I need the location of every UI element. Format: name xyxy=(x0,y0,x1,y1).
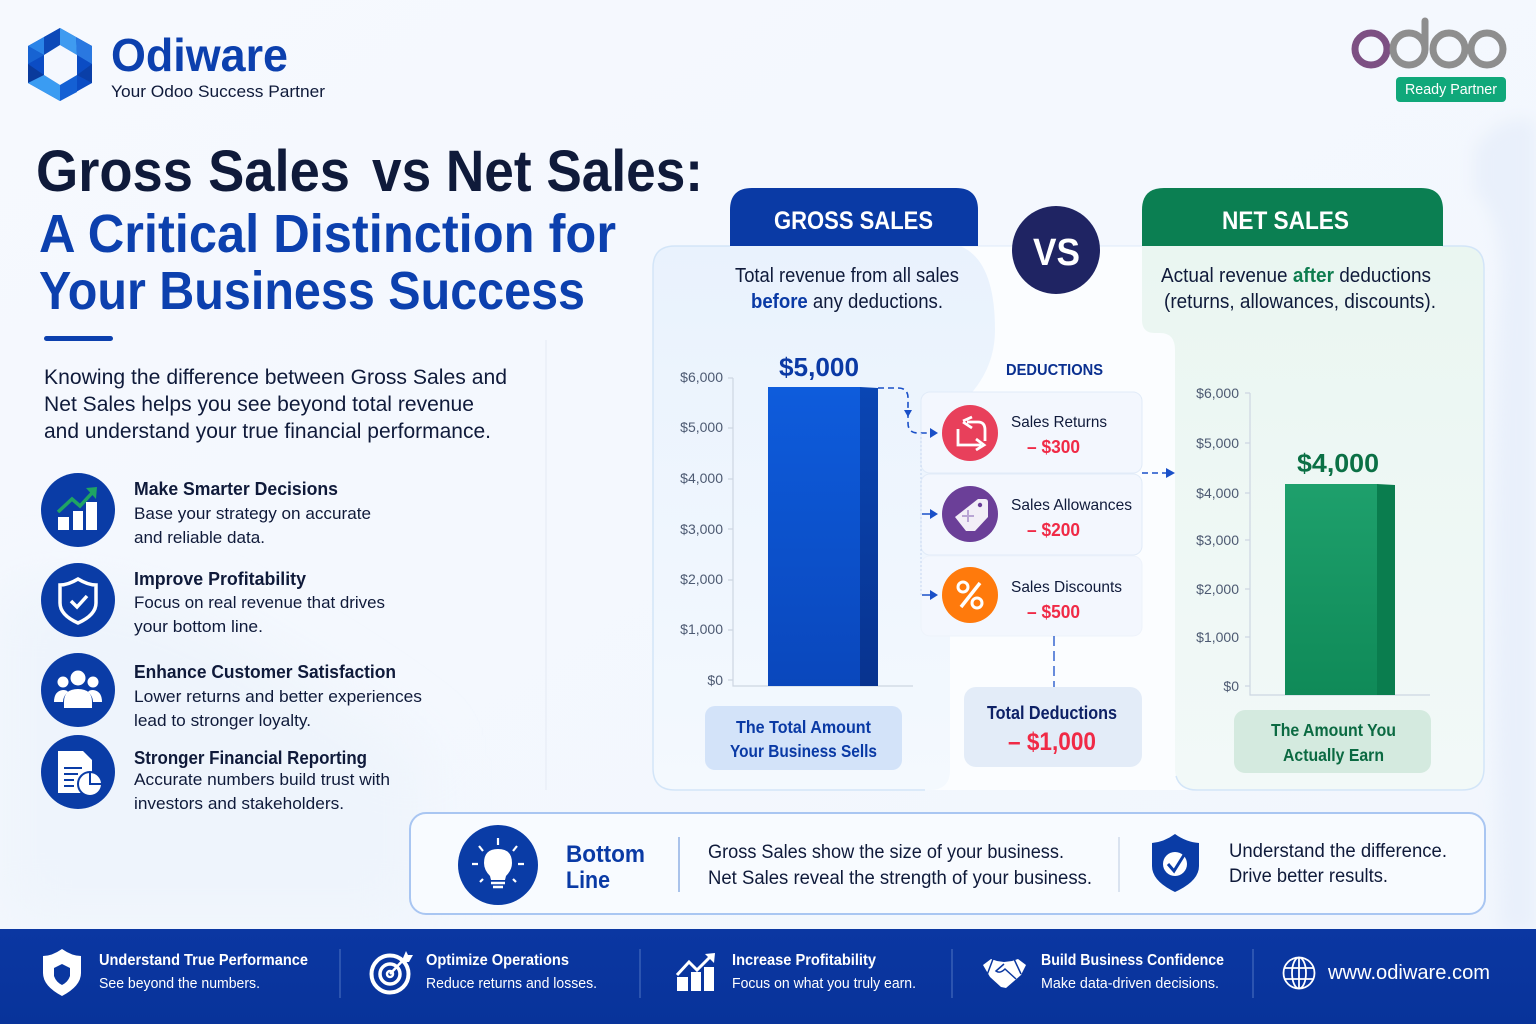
total deductions xyxy=(964,687,1142,767)
card: sales returns xyxy=(921,392,1142,473)
title: A Critical Distinction for xyxy=(39,204,616,264)
bottom line heading: Line xyxy=(566,867,610,894)
bottom line statement: Net Sales reveal the strength of your business. xyxy=(708,868,1092,889)
footer item: website xyxy=(1284,958,1490,988)
total deductions: Total Deductions xyxy=(987,703,1117,723)
VS badge xyxy=(1012,206,1100,294)
card: sales discounts: Sales Discounts xyxy=(1011,579,1122,596)
caption: the amount you actually earn: The Amount You xyxy=(1271,720,1396,740)
bar chart: gross sales: $1,000 xyxy=(680,621,723,637)
arrow: gross sales to deductions xyxy=(878,388,938,600)
net sales description xyxy=(1161,265,1436,313)
tab: gross sales: GROSS SALES xyxy=(774,207,933,235)
comparison central backdrop xyxy=(900,246,1200,790)
footer item: optimize operations xyxy=(372,951,597,992)
footer item: increase profitability xyxy=(677,952,916,992)
footer band xyxy=(0,929,1536,1024)
arrow: deductions to total xyxy=(1053,636,1055,687)
title: Your Business Success xyxy=(39,261,585,321)
call to action: Understand the difference. xyxy=(1229,841,1447,862)
title: Gross Sales xyxy=(36,139,350,204)
footer item: website: www.odiware.com xyxy=(1327,962,1490,984)
benefit: Improve Profitability: Improve Profitability xyxy=(134,568,307,589)
bar chart: net sales: $5,000 xyxy=(1196,435,1239,451)
benefit: Stronger Financial Reporting: Accurate numbers build trust with xyxy=(134,770,390,789)
card: sales returns: Sales Returns xyxy=(1011,414,1107,431)
bar chart: net sales: $3,000 xyxy=(1196,532,1239,548)
bar chart: gross sales: $5,000 xyxy=(680,419,723,435)
arrow: deductions to net sales xyxy=(1142,468,1175,478)
card: sales discounts: – $500 xyxy=(1027,602,1080,622)
card: sales allowances: Sales Allowances xyxy=(1011,497,1132,514)
panel: bottom line xyxy=(410,813,1485,914)
benefit: Make Smarter Decisions xyxy=(41,473,371,547)
tab: net sales: NET SALES xyxy=(1222,207,1349,235)
caption: the amount you actually earn xyxy=(1234,710,1431,773)
footer item: understand true performance xyxy=(43,949,308,996)
bar chart: net sales: $0 xyxy=(1223,678,1239,694)
bar chart: net sales xyxy=(1196,385,1430,695)
intro paragraph: Net Sales helps you see beyond total revenue xyxy=(44,393,474,416)
caption: the total amount your business sells xyxy=(705,706,902,770)
badge: Ready Partner: Ready Partner xyxy=(1405,82,1497,98)
bottom line heading xyxy=(566,841,645,894)
tagline: Your Odoo Success Partner xyxy=(111,82,325,101)
caption: the amount you actually earn: Actually Earn xyxy=(1283,745,1384,765)
benefit: Improve Profitability: your bottom line. xyxy=(134,617,263,636)
panel: gross sales xyxy=(653,188,995,790)
logo: Odoo Ready Partner xyxy=(1355,21,1506,102)
bar chart: gross sales: $4,000 xyxy=(680,470,723,486)
gross sales description: before any deductions. xyxy=(751,291,943,313)
footer item: build business confidence xyxy=(983,952,1224,992)
bar chart: gross sales: $0 xyxy=(707,672,723,688)
logo: Odiware xyxy=(28,28,325,101)
bottom line heading: Bottom xyxy=(566,841,645,868)
icon: percent xyxy=(942,567,998,623)
net sales description: Actual revenue after deductions xyxy=(1161,265,1431,287)
benefit: Enhance Customer Satisfaction: lead to stronger loyalty. xyxy=(134,711,311,730)
benefit: Enhance Customer Satisfaction: Enhance Customer Satisfaction xyxy=(134,661,396,682)
caption: the total amount your business sells: The Total Amount xyxy=(736,717,871,737)
icon: shield check xyxy=(1152,834,1199,892)
benefit: Make Smarter Decisions: Make Smarter Decisions xyxy=(134,478,338,499)
benefit: Stronger Financial Reporting: investors and stakeholders. xyxy=(134,794,344,813)
benefit: Enhance Customer Satisfaction xyxy=(41,653,422,730)
intro paragraph: Knowing the difference between Gross Sales and xyxy=(44,366,507,389)
bar chart: gross sales: $5,000 xyxy=(779,352,859,382)
tab: gross sales xyxy=(730,188,978,246)
bar chart: net sales: $6,000 xyxy=(1196,385,1239,401)
odoo wordmark xyxy=(1355,21,1503,65)
icon: shield check xyxy=(41,563,115,637)
benefit: Make Smarter Decisions: Base your strategy on accurate xyxy=(134,504,371,523)
card: sales allowances xyxy=(921,474,1142,555)
caption: the total amount your business sells: Your Business Sells xyxy=(730,741,877,761)
intro paragraph xyxy=(44,366,507,443)
VS badge: VS xyxy=(1033,232,1080,274)
benefit: Stronger Financial Reporting: Stronger Financial Reporting xyxy=(134,747,367,768)
bar chart: gross sales: $6,000 xyxy=(680,369,723,385)
footer item: build business confidence: Make data-driven decisions. xyxy=(1041,976,1219,992)
bar chart: gross sales xyxy=(680,352,913,688)
bar chart: net sales: $4,000 xyxy=(1297,448,1379,478)
bar chart: gross sales: $3,000 xyxy=(680,521,723,537)
icon: growth chart xyxy=(41,473,115,547)
bar chart: gross sales: $2,000 xyxy=(680,571,723,587)
benefit: Stronger Financial Reporting xyxy=(41,735,390,813)
call to action: Drive better results. xyxy=(1229,866,1388,887)
footer item: increase profitability: Focus on what you truly earn. xyxy=(732,976,916,992)
icon: people group xyxy=(41,653,115,727)
bar chart: net sales: $4,000 xyxy=(1196,485,1239,501)
benefit: Improve Profitability: Focus on real revenue that drives xyxy=(134,593,385,612)
footer item: optimize operations: Optimize Operations xyxy=(426,952,569,969)
title xyxy=(36,139,703,321)
icon: report document xyxy=(41,735,115,809)
icon: returns xyxy=(942,405,998,461)
call to action xyxy=(1229,841,1447,887)
deductions heading: DEDUCTIONS xyxy=(1006,362,1103,379)
total deductions: – $1,000 xyxy=(1008,728,1096,756)
tab: net sales xyxy=(1142,188,1443,246)
bar chart: net sales: $2,000 xyxy=(1196,581,1239,597)
card: sales allowances: – $200 xyxy=(1027,520,1080,540)
footer item: understand true performance: See beyond the numbers. xyxy=(99,976,260,992)
benefit: Make Smarter Decisions: and reliable data. xyxy=(134,528,265,547)
intro paragraph: and understand your true financial performance. xyxy=(44,420,491,443)
footer item: build business confidence: Build Business Confidence xyxy=(1041,952,1224,969)
title: vs Net Sales: xyxy=(372,139,703,204)
badge: Ready Partner xyxy=(1396,77,1506,102)
gross sales description: Total revenue from all sales xyxy=(735,265,959,287)
benefit: Enhance Customer Satisfaction: Lower returns and better experiences xyxy=(134,687,422,706)
gross sales description xyxy=(735,265,959,313)
card: sales returns: – $300 xyxy=(1027,437,1080,457)
benefit: Improve Profitability xyxy=(41,563,385,637)
brand name: Odiware xyxy=(111,29,288,81)
bottom line statement: Gross Sales show the size of your business. xyxy=(708,842,1064,863)
panel: net sales xyxy=(1142,188,1484,790)
net sales description: (returns, allowances, discounts). xyxy=(1164,291,1436,313)
footer item: optimize operations: Reduce returns and losses. xyxy=(426,976,597,992)
bar chart: net sales: $1,000 xyxy=(1196,629,1239,645)
bottom line statement xyxy=(708,842,1092,889)
icon: price tag xyxy=(942,486,998,542)
card: sales discounts xyxy=(921,556,1142,636)
footer item: understand true performance: Understand True Performance xyxy=(99,952,308,969)
footer item: increase profitability: Increase Profitability xyxy=(732,952,876,969)
icon: hexagon logo mark xyxy=(28,28,92,101)
icon: light bulb xyxy=(458,825,538,905)
